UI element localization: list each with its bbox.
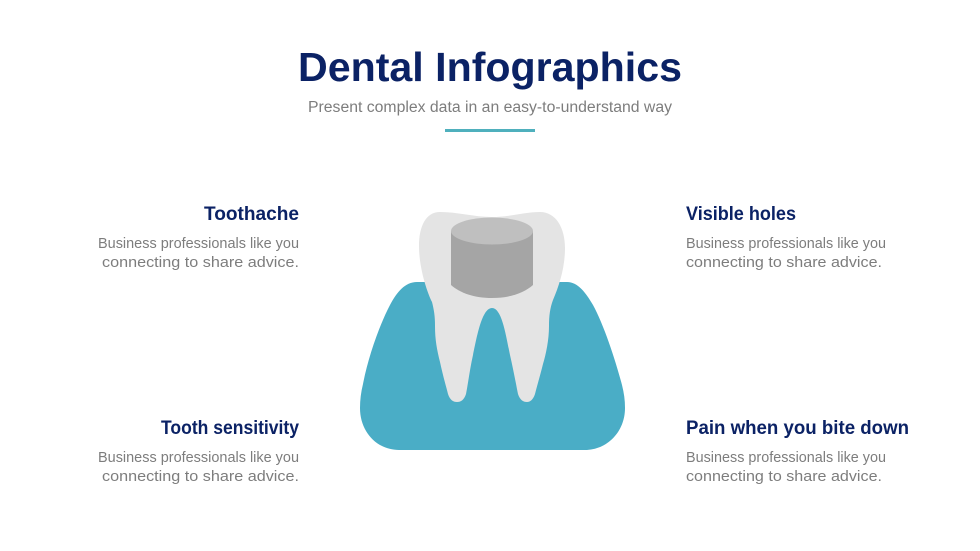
icon: tooth in gum with cavity	[360, 212, 625, 450]
text block: Pain when you bite down	[686, 418, 909, 485]
tooth	[419, 212, 565, 402]
text block: Pain when you bite down: Pain when you bite down	[686, 418, 909, 439]
text block: Tooth sensitivity: Tooth sensitivity	[161, 418, 299, 439]
cavity cylinder top	[451, 218, 533, 244]
gum	[360, 282, 625, 450]
cavity cylinder side	[451, 231, 533, 298]
accent underline	[445, 129, 535, 132]
text block: Visible holes: Visible holes	[686, 204, 796, 225]
text block: Toothache	[98, 204, 299, 271]
text block: Toothache: Toothache	[204, 204, 299, 225]
title: Dental Infographics	[298, 44, 682, 90]
text block: Toothache: connecting to share advice.	[102, 254, 299, 271]
text block: Tooth sensitivity: Business professionals like you	[98, 449, 299, 466]
text block: Visible holes: Business professionals like you	[686, 235, 886, 252]
subtitle: Present complex data in an easy-to-understand way	[308, 99, 672, 116]
text block: Pain when you bite down: Business professionals like you	[686, 449, 886, 466]
text block: Tooth sensitivity: connecting to share advice.	[102, 468, 299, 485]
text block: Tooth sensitivity	[98, 418, 299, 485]
text block: Visible holes	[686, 204, 886, 271]
text block: Visible holes: connecting to share advice.	[686, 254, 882, 271]
text block: Toothache: Business professionals like you	[98, 235, 299, 252]
text block: Pain when you bite down: connecting to share advice.	[686, 468, 882, 485]
